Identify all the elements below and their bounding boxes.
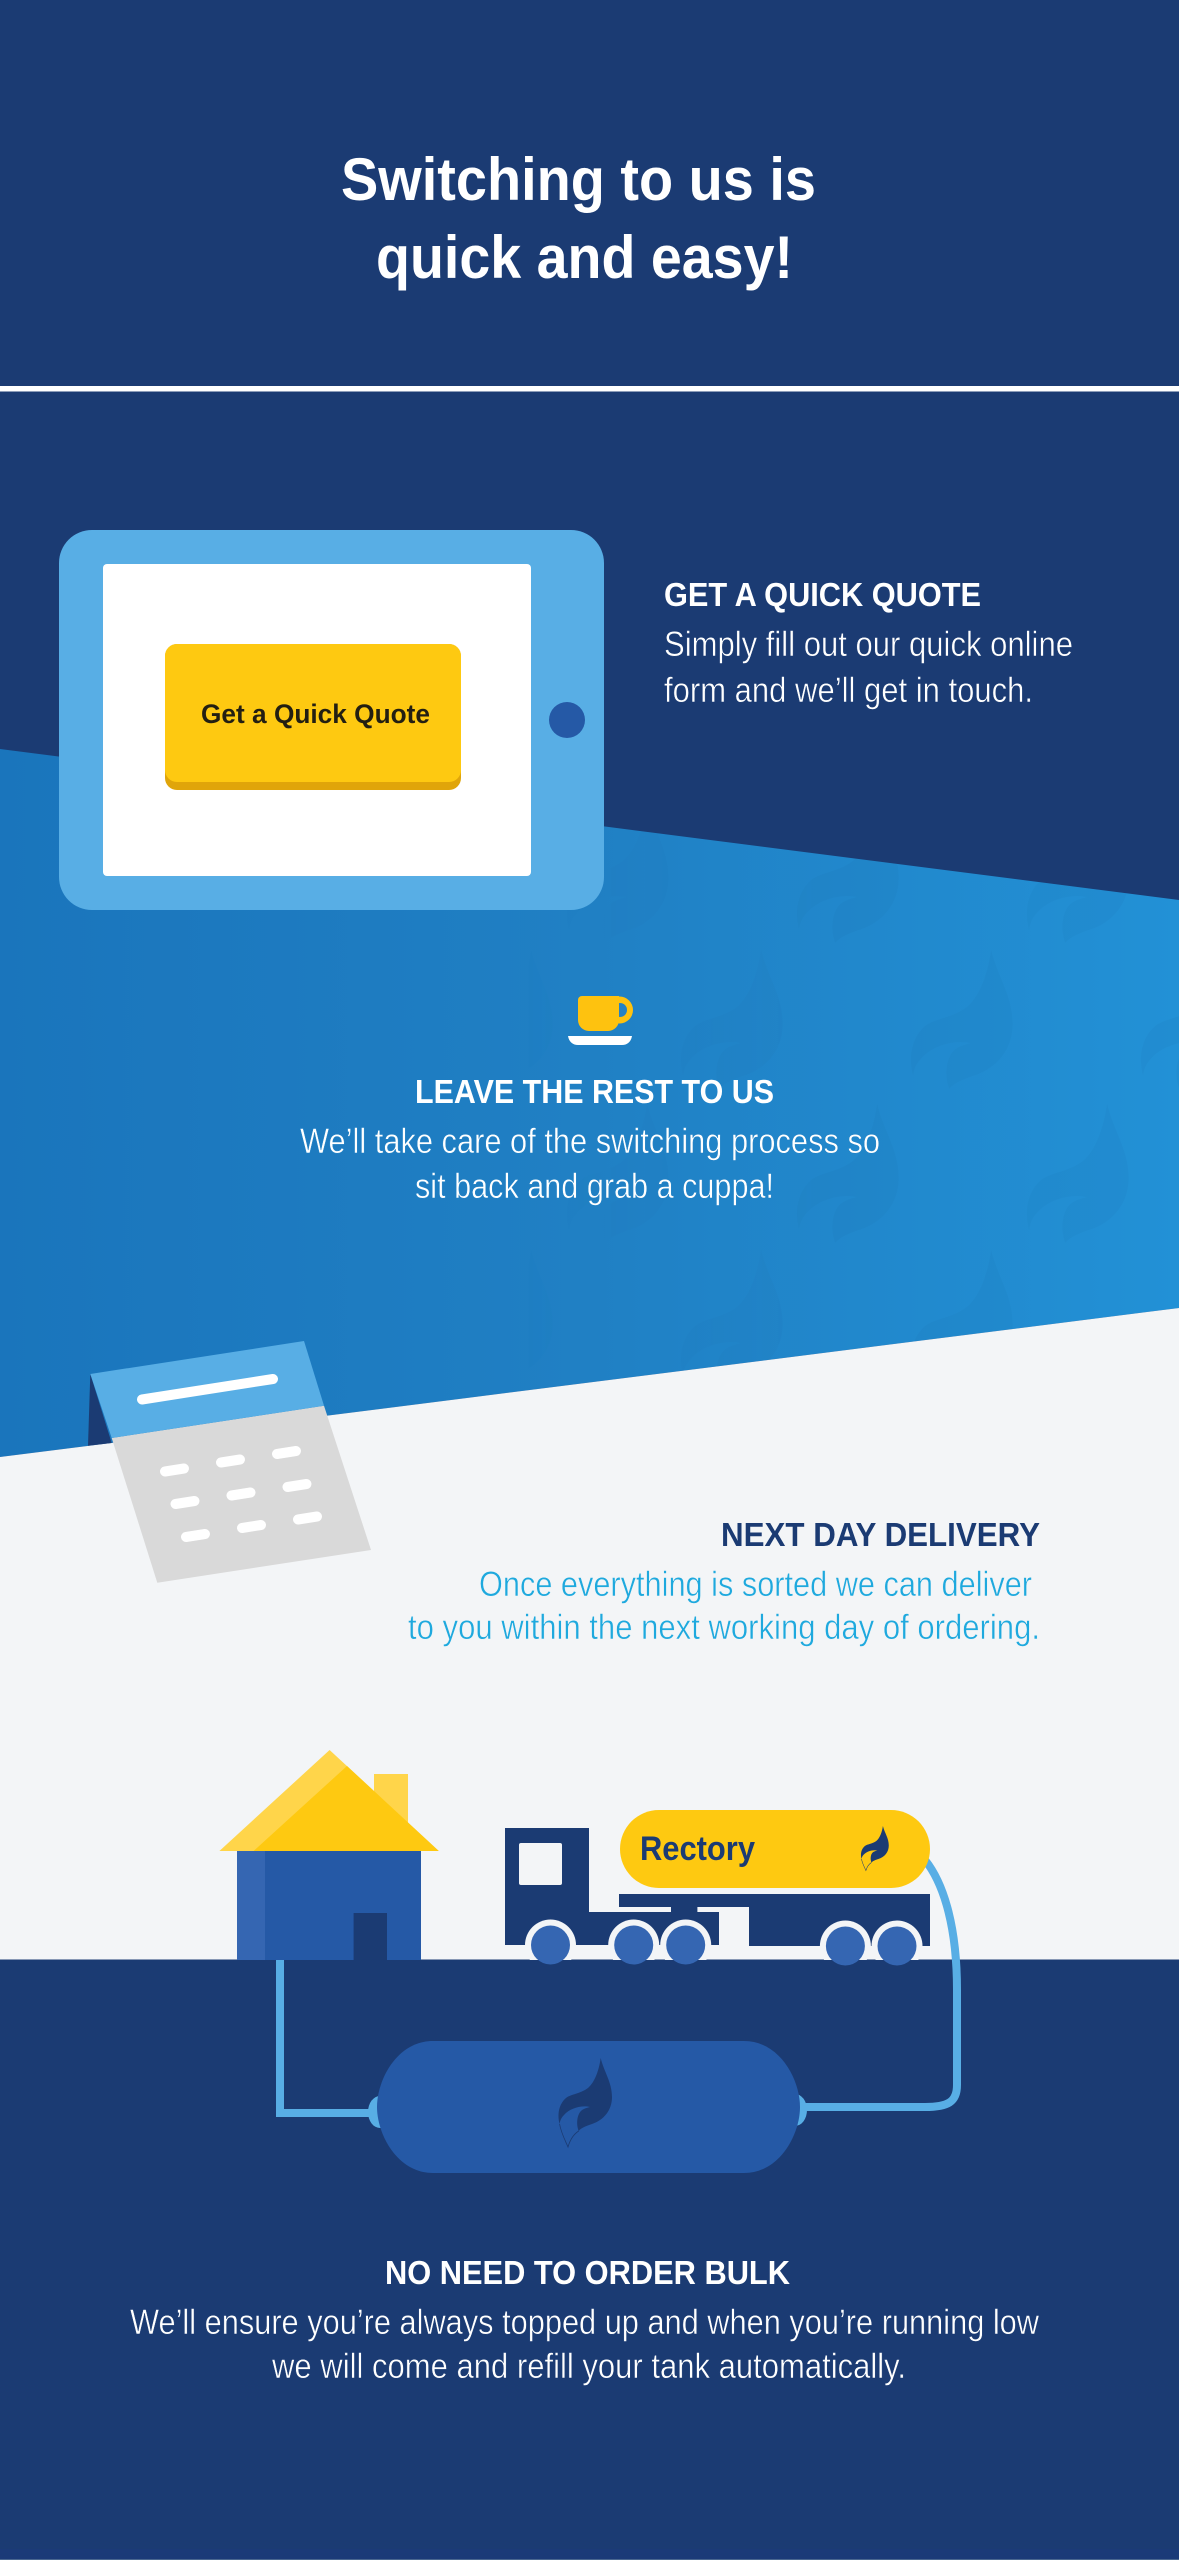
title divider line xyxy=(0,386,1179,392)
text block: next day delivery: NEXT DAY DELIVERY xyxy=(721,1516,1040,1553)
icon: delivery truck xyxy=(505,1810,930,1972)
truck tank with logo xyxy=(620,1810,930,1888)
title: quick and easy! xyxy=(376,224,793,291)
panel: light diagonal section xyxy=(0,1308,1179,1960)
icon: calendar xyxy=(88,1341,371,1583)
text block: no need to order bulk xyxy=(130,2254,1040,2386)
panel: blue diagonal band xyxy=(0,749,1179,1457)
icon: coffee cup xyxy=(568,996,633,1045)
text block: leave the rest to us: sit back and grab a cuppa! xyxy=(415,1167,774,1206)
text block: get a quick quote: form and we’ll get in touch. xyxy=(664,671,1033,710)
button: get a quick quote: Get a Quick Quote xyxy=(201,699,430,729)
title xyxy=(341,146,816,291)
text block: leave the rest to us xyxy=(300,1073,880,1206)
button: get a quick quote xyxy=(165,644,461,790)
icon: tablet with quote button xyxy=(59,530,604,910)
text block: next day delivery: to you within the next working day of ordering. xyxy=(408,1608,1040,1647)
icon: storage tank with flame xyxy=(368,2041,807,2173)
text block: no need to order bulk: NO NEED TO ORDER BULK xyxy=(385,2254,790,2291)
text block: leave the rest to us: We’ll take care of the switching process so xyxy=(300,1122,880,1161)
text block: no need to order bulk: we will come and refill your tank automatically. xyxy=(271,2347,906,2386)
panel: lower navy section xyxy=(0,1960,1179,2560)
icon: pipes connecting truck, tank and house xyxy=(280,1860,957,2113)
text block: get a quick quote: Simply fill out our quick online xyxy=(664,625,1073,664)
icon: house xyxy=(219,1750,439,1960)
text block: no need to order bulk: We’ll ensure you’re always topped up and when you’re running low xyxy=(130,2303,1040,2342)
truck tank with logo: Rectory xyxy=(640,1830,755,1868)
text block: get a quick quote: GET A QUICK QUOTE xyxy=(664,576,981,613)
text block: next day delivery: Once everything is sorted we can deliver xyxy=(479,1565,1032,1604)
text block: get a quick quote xyxy=(664,576,1073,710)
text block: next day delivery xyxy=(408,1516,1040,1647)
title: Switching to us is xyxy=(341,146,816,213)
text block: leave the rest to us: LEAVE THE REST TO US xyxy=(415,1073,774,1110)
